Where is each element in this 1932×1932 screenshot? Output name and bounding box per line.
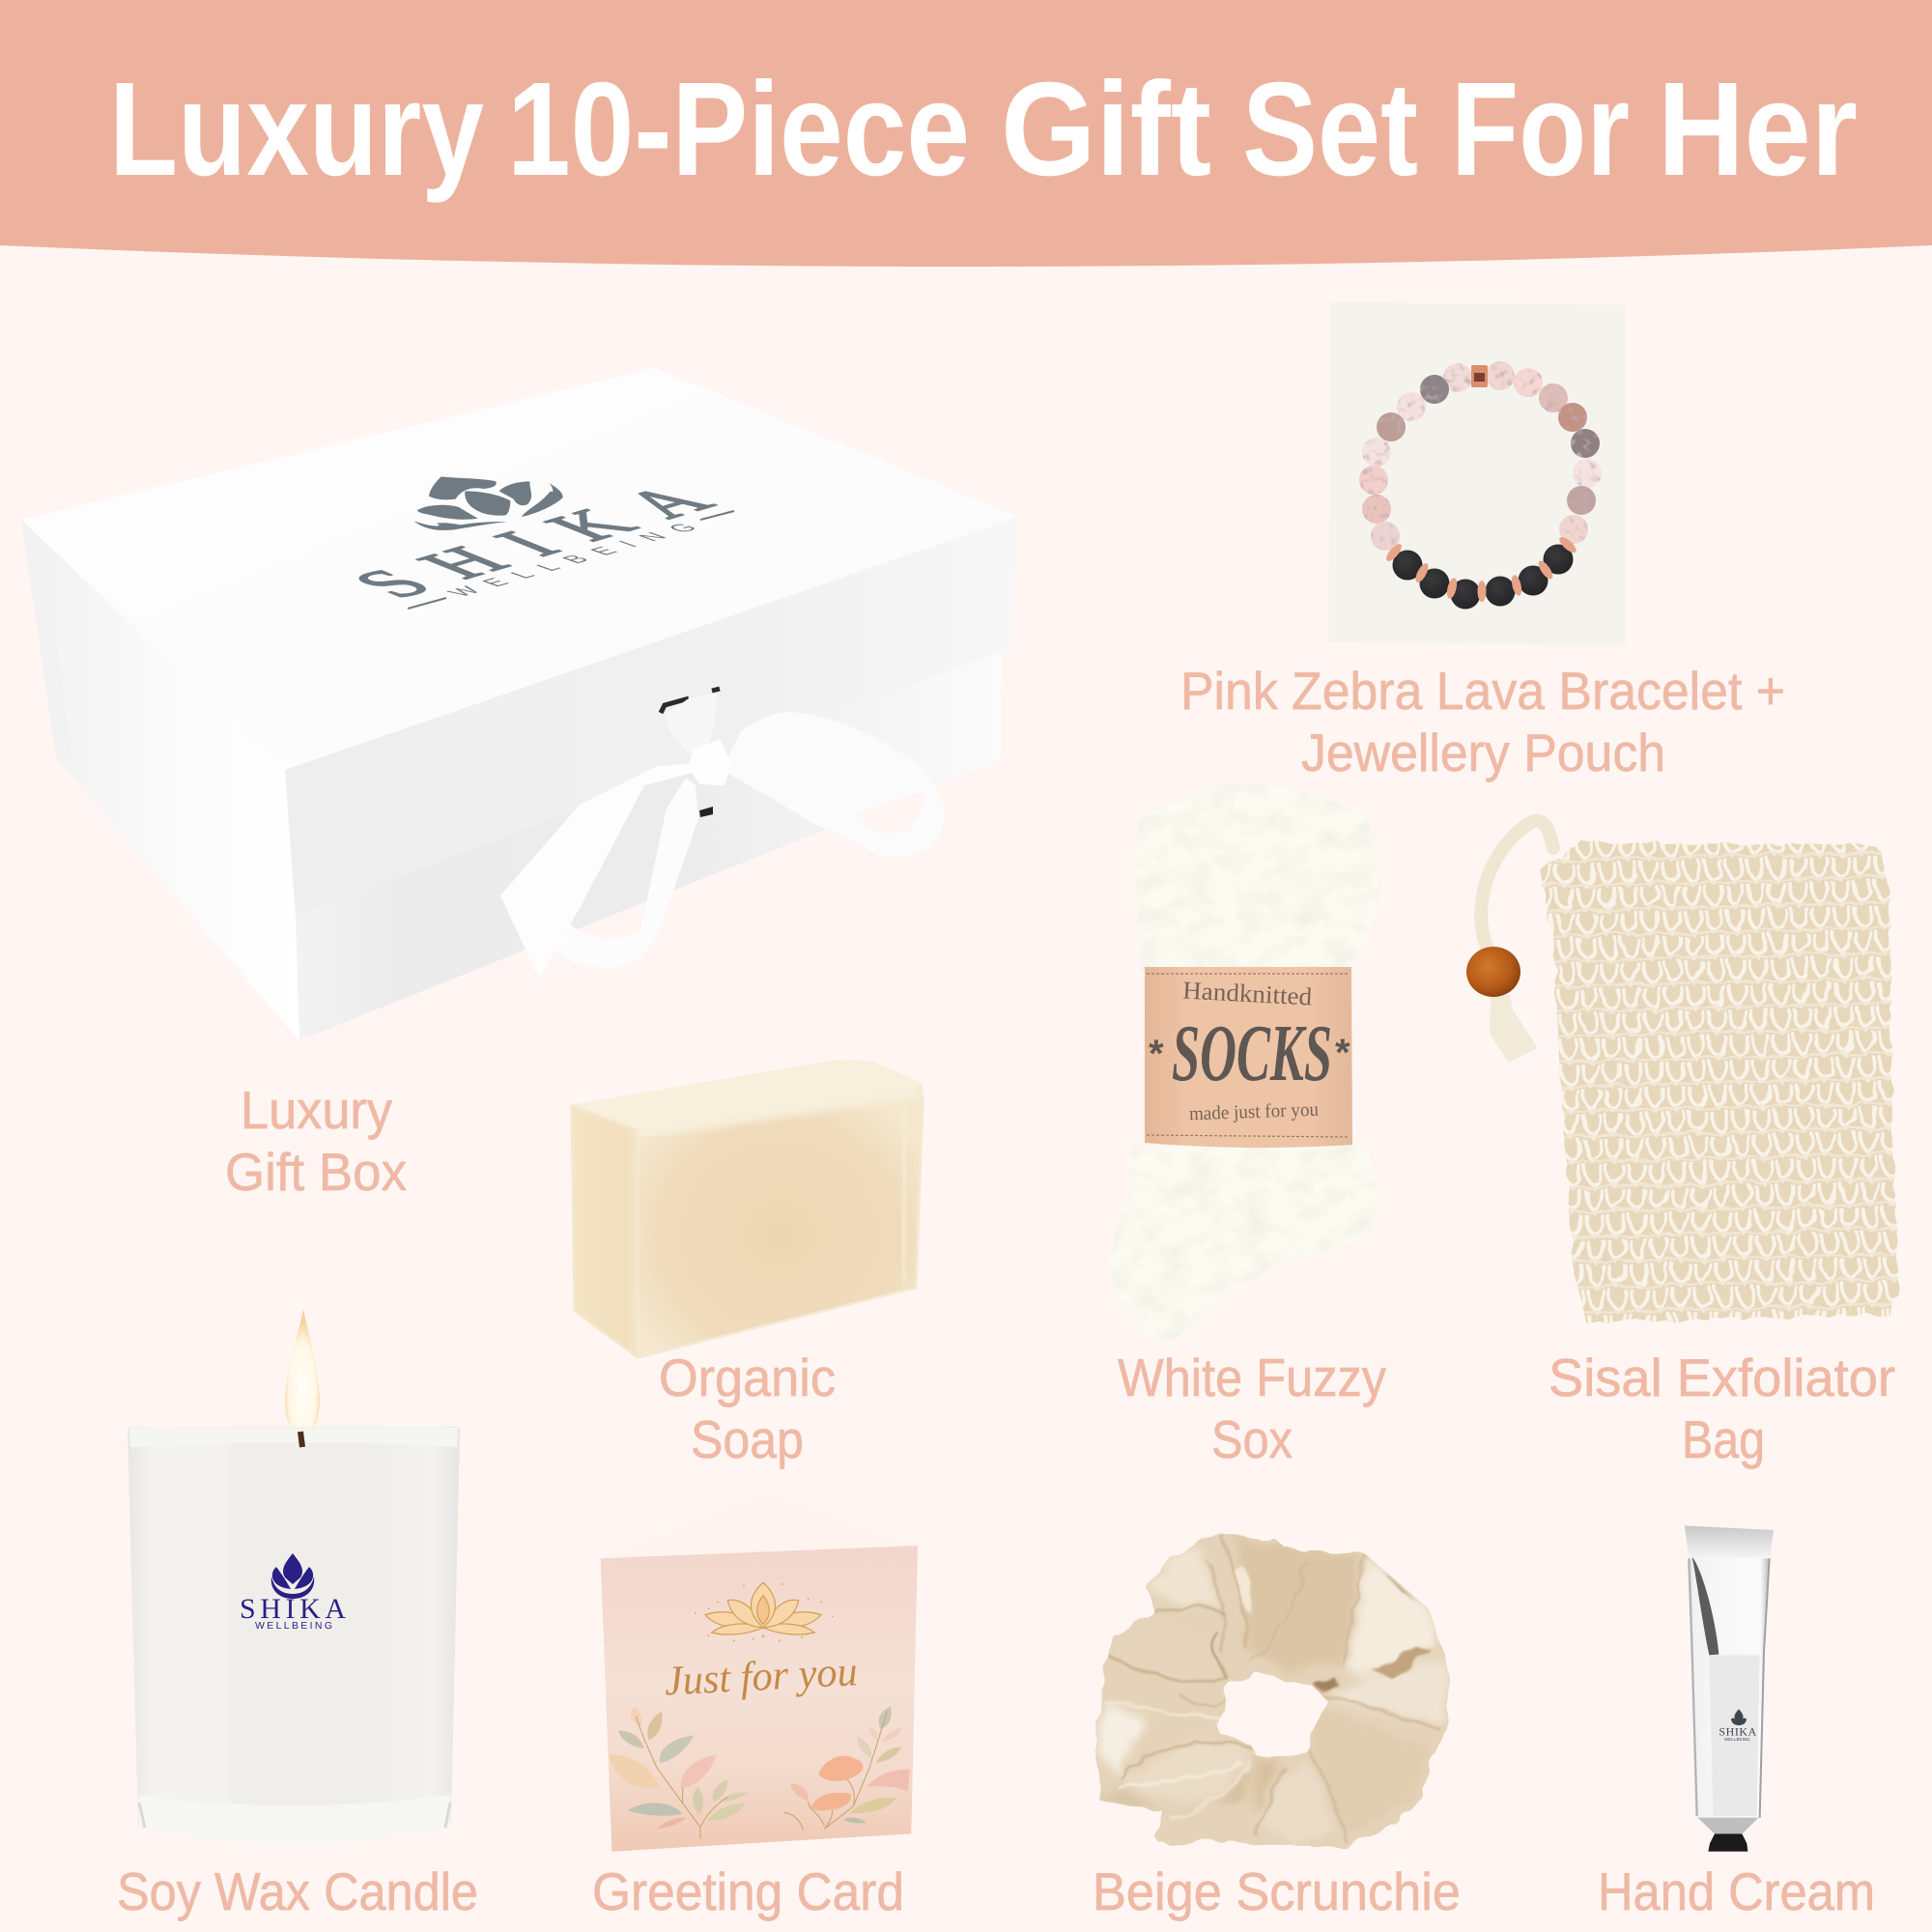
icon: left watercolor leaves [609,1707,749,1838]
label: luxury gift box [225,1080,407,1202]
icon: card back page [601,1493,918,1558]
icon: wooden bead [1466,947,1520,997]
label: soap [659,1348,836,1469]
label: sisal: Bag [1682,1409,1765,1469]
icon: rose gold rondelles [1383,534,1578,602]
icon: flame [285,1309,320,1435]
panel: luxury gift box [21,368,1018,1202]
icon: kraft sock band [1145,967,1352,1148]
label: candle: Soy Wax Candle [117,1861,478,1921]
text: socks: SOCKS [1172,1009,1332,1098]
title: Set [1242,55,1418,204]
label: socks: White Fuzzy [1118,1348,1386,1407]
icon: box base front [296,651,1002,1040]
icon: wick [300,1432,302,1447]
text: tube wellbeing: WELLBEING [1724,1737,1750,1742]
icon: hand cream tube [1685,1525,1774,1852]
icon: tube crimp [1685,1525,1774,1558]
icon: tube lotus logo [1731,1709,1747,1725]
panel: organic soap [572,1061,923,1469]
text: tube shika: SHIKA [1719,1725,1757,1739]
label: socks: Sox [1211,1409,1293,1469]
icon: candle lotus logo [271,1553,314,1599]
icon: candle rim [129,1428,458,1447]
label: sisal: Sisal Exfoliator [1548,1348,1895,1407]
label: socks [1118,1348,1386,1469]
label: bracelet [1180,661,1785,782]
icon: gold dots [695,1583,834,1641]
text: made just for you: made just for you [1189,1099,1319,1124]
title [109,55,1858,204]
text: just for you: Just for you [664,1648,859,1705]
icon: soap bar [572,1061,923,1357]
icon: candle glass [128,1427,460,1843]
title: Gift [1001,55,1211,204]
label: hand cream: Hand Cream [1598,1861,1875,1921]
icon: box lid top [21,368,1018,770]
label: scrunchie: Beige Scrunchie [1093,1861,1461,1921]
panel: sisal bag [1466,821,1898,1469]
icon: tube body [1685,1525,1774,1835]
icon: white socks [1109,784,1379,1342]
icon: right watercolor flowers [784,1707,910,1831]
title: Her [1658,55,1858,204]
icon: tube cap [1708,1833,1747,1852]
label: soap: Soap [691,1409,804,1469]
text: asterisks: * [1335,1032,1350,1074]
text: candle shika: SHIKA [240,1593,346,1625]
icon: shika logo on lid: SHIKA [331,478,733,606]
text: handknitted: Handknitted [1182,977,1313,1010]
label: soap: Organic [659,1348,836,1407]
text: candle wellbeing: WELLBEING [255,1620,332,1632]
header banner [0,0,1932,267]
panel: beige scrunchie [1082,1526,1468,1921]
icon: card front [601,1546,918,1852]
icon: copper spacer [1471,365,1488,387]
icon: tube shoulder [1697,1818,1759,1833]
panel: fuzzy socks [1109,784,1386,1469]
icon: shika logo on lid: WELLBEING [441,522,704,599]
icon: pink zebra beads [1359,361,1602,551]
icon: tassel [1490,995,1538,1063]
icon: tube sheen [1692,1557,1719,1655]
icon: card artwork [601,1493,918,1852]
title: 10-Piece [507,55,970,204]
icon: box lid front [285,517,1018,915]
icon: ribbon slot [661,689,720,713]
icon: scrunchie [1095,1534,1451,1849]
panel: greeting card [592,1493,918,1921]
panel: soy wax candle [117,1309,478,1921]
icon: sisal mesh bag [1540,842,1898,1322]
text: asterisks: * [1149,1033,1164,1075]
text: asterisks [1149,1032,1350,1075]
panel: bracelet [1180,302,1785,782]
icon: tube label [1709,1655,1760,1816]
icon: box left side [21,520,299,1040]
icon: white satin ribbon [500,694,945,979]
label: bracelet: Pink Zebra Lava Bracelet + [1180,661,1785,721]
label: sisal [1548,1348,1895,1469]
label: bracelet: Jewellery Pouch [1301,723,1665,782]
icon: lava beads [1393,545,1573,609]
label: luxury gift box: Gift Box [225,1142,407,1202]
icon: drawstring cord [1481,821,1553,952]
panel: hand cream [1598,1525,1875,1921]
label: luxury gift box: Luxury [241,1080,392,1140]
title: Luxury [109,55,484,204]
icon: bracelet card [1328,302,1626,645]
label: card: Greeting Card [592,1861,904,1921]
icon: gold lotus [705,1582,821,1634]
title: For [1451,55,1630,204]
